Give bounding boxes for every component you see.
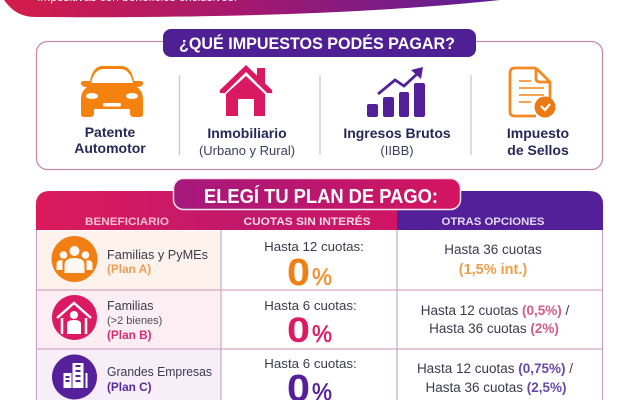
interest-free: Plan A: % xyxy=(312,264,332,291)
other options: Plan C: Hasta 36 cuotas (2,5%) xyxy=(425,380,567,395)
top banner xyxy=(4,0,500,17)
interest-free: Plan C: Hasta 6 cuotas: xyxy=(264,356,357,371)
heading: choose your plan: ELEGÍ TU PLAN DE PAGO: xyxy=(204,185,438,208)
tax name: Inmobiliario: (Urbano y Rural) xyxy=(199,143,295,158)
tax name: Impuesto de Sellos: Impuesto xyxy=(507,125,569,141)
beneficiary label: Plan A: (Plan A) xyxy=(107,262,151,276)
table header: left xyxy=(36,191,397,230)
icon: house xyxy=(220,65,272,116)
table header: right xyxy=(397,191,603,230)
tax name: Impuesto de Sellos xyxy=(507,125,569,158)
panel: payment plans table xyxy=(36,178,603,400)
other options: Plan B: Hasta 12 cuotas (0,5%) / xyxy=(421,303,570,318)
icon: rising bar chart xyxy=(367,67,425,117)
interest-free: Plan B xyxy=(264,298,357,350)
heading: taxes: ¿QUÉ IMPUESTOS PODÉS PAGAR? xyxy=(179,34,455,53)
column header: beneficiary: BENEFICIARIO xyxy=(85,216,169,228)
tax name: Ingresos Brutos: Ingresos Brutos xyxy=(343,125,451,141)
icon: document with check xyxy=(510,68,556,118)
icon: office buildings xyxy=(52,354,97,400)
tax name: Ingresos Brutos xyxy=(343,125,451,158)
interest-free: Plan A: 0 xyxy=(287,252,310,294)
tax name: Ingresos Brutos: (IIBB) xyxy=(380,143,414,158)
beneficiary label: Plan C xyxy=(107,365,212,394)
other options: Plan A: (1,5% int.) xyxy=(459,262,527,278)
beneficiary label: Plan B: Familias xyxy=(107,299,154,313)
beneficiary label: Plan C: Grandes Empresas xyxy=(107,365,212,379)
interest-free: Plan A: Hasta 12 cuotas: xyxy=(264,239,364,254)
other options: Plan A: Hasta 36 cuotas xyxy=(444,242,542,257)
row: Plan A xyxy=(52,236,542,294)
interest-free: Plan C xyxy=(264,356,357,400)
row: Plan B xyxy=(52,295,570,350)
interest-free: Plan B: % xyxy=(312,321,332,348)
icon: car xyxy=(81,66,143,117)
interest-free: Plan A xyxy=(264,239,364,294)
row: Plan C xyxy=(52,354,573,400)
other options: Plan A xyxy=(444,242,542,278)
other options: Plan C xyxy=(417,361,573,395)
other options: Plan C: Hasta 12 cuotas (0,75%) / xyxy=(417,361,573,376)
beneficiary label: Plan B xyxy=(107,299,162,342)
row 1 beneficiary background xyxy=(37,231,221,290)
beneficiary label: Plan A: Familias y PyMEs xyxy=(107,248,208,262)
row 3 beneficiary background xyxy=(37,349,221,400)
tax name: Patente Automotor: Patente xyxy=(85,124,135,140)
beneficiary label: Plan B: (Plan B) xyxy=(107,328,152,342)
tax name: Inmobiliario: Inmobiliario xyxy=(207,125,287,141)
beneficiary label: Plan A xyxy=(107,248,208,276)
tax name: Inmobiliario xyxy=(199,125,295,158)
other options: Plan B: Hasta 36 cuotas (2%) xyxy=(429,321,559,336)
column header: interest-free installments: CUOTAS SIN INTERÉS xyxy=(244,215,370,228)
beneficiary label: Plan B: (>2 bienes) xyxy=(107,315,162,327)
icon: family with house xyxy=(52,295,97,340)
tax name: Patente Automotor: Automotor xyxy=(74,140,146,156)
interest-free: Plan B: 0 xyxy=(287,311,310,350)
tax name: Impuesto de Sellos: de Sellos xyxy=(507,142,569,158)
other options: Plan B xyxy=(421,303,570,336)
heading: choose your plan xyxy=(174,178,460,210)
tax name: Patente Automotor xyxy=(74,124,146,156)
icon: family group xyxy=(52,236,98,282)
row 2 beneficiary background xyxy=(37,290,221,349)
beneficiary label: Plan C: (Plan C) xyxy=(107,380,152,394)
column header: other options: OTRAS OPCIONES xyxy=(442,216,544,228)
interest-free: Plan B: Hasta 6 cuotas: xyxy=(264,298,357,313)
panel: taxes you can pay xyxy=(36,29,602,170)
heading: taxes xyxy=(163,29,476,57)
